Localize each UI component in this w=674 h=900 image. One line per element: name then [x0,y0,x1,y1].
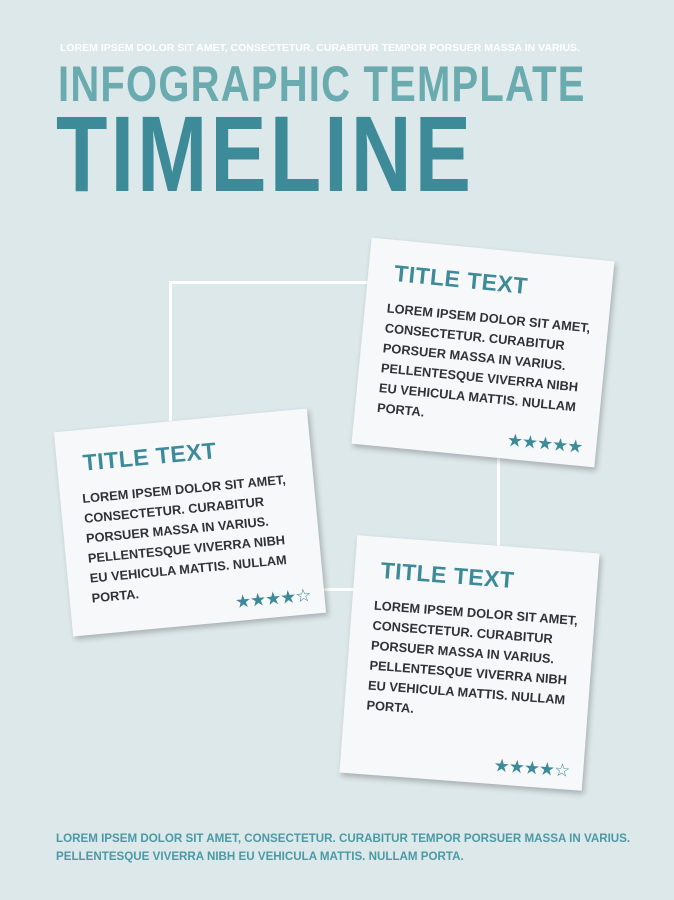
card 3 title: TITLE TEXT [380,557,515,593]
card 2 text: CONSECTETUR. CURABITUR [83,494,265,526]
subtitle: LOREM IPSEM DOLOR SIT AMET, CONSECTETUR. CURABITUR TEMPOR PORSUER MASSA IN VARIUS. [60,42,580,54]
card 3 text [366,598,578,716]
card 3 text: LOREM IPSEM DOLOR SIT AMET, [374,598,578,628]
card 1 text: PELLENTESQUE VIVERRA NIBH [380,360,579,394]
card 1 title: TITLE TEXT [393,260,529,299]
card 2 text: PORSUER MASSA IN VARIUS. [85,514,269,546]
card 3 text: CONSECTETUR. CURABITUR [372,618,553,646]
card 2 text [82,472,287,606]
footer text: LOREM IPSEM DOLOR SIT AMET, CONSECTETUR. CURABITUR TEMPOR PORSUER MASSA IN VARIUS. [56,832,630,845]
card 3 rating: ★★★★☆ [493,755,570,781]
card 3 text: PORSUER MASSA IN VARIUS. [371,638,555,666]
card 3 text: PORTA. [366,697,414,716]
card 1 text: LOREM IPSEM DOLOR SIT AMET, [386,300,591,335]
card 2 text: LOREM IPSEM DOLOR SIT AMET, [82,472,286,506]
card 2 [54,409,326,636]
card 1 [351,238,615,467]
footer text [56,832,630,863]
card 1 rating: ★★★★★ [506,430,583,457]
heading: infographic template: INFOGRAPHIC TEMPLATE [58,56,586,112]
card 3 text: PELLENTESQUE VIVERRA NIBH [369,658,567,687]
card 2 title: TITLE TEXT [82,437,218,476]
card 3 text: EU VEHICULA MATTIS. NULLAM [368,677,566,707]
card 1 text: CONSECTETUR. CURABITUR [384,320,565,353]
card 2 text: EU VEHICULA MATTIS. NULLAM [89,552,287,586]
card 1 text [376,300,591,420]
card 1 text: EU VEHICULA MATTIS. NULLAM [378,380,577,414]
card 2 text: PORTA. [91,586,140,606]
card 1 text: PORSUER MASSA IN VARIUS. [382,340,566,373]
footer text: PELLENTESQUE VIVERRA NIBH EU VEHICULA MATTIS. NULLAM PORTA. [56,850,464,863]
card 2 rating: ★★★★☆ [234,585,311,612]
card 1 text: PORTA. [376,400,425,420]
card 3 [339,535,600,791]
heading: timeline: TIMELINE [56,93,474,214]
card 2 text: PELLENTESQUE VIVERRA NIBH [87,532,286,566]
